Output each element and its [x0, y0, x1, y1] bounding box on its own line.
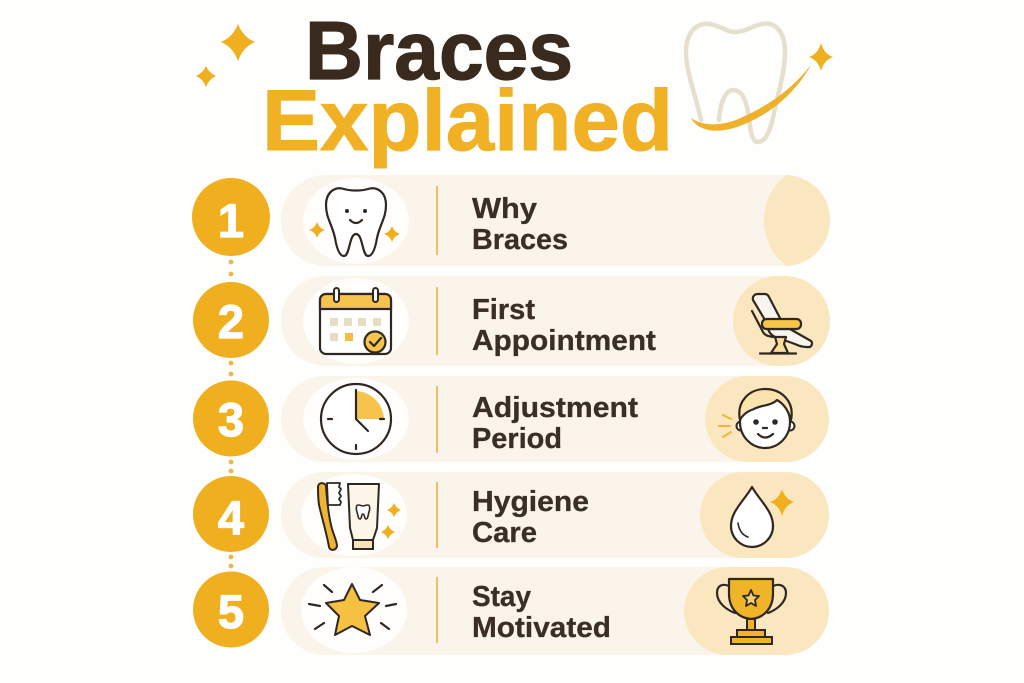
- panel: step 4 hygiene care: [193, 472, 829, 558]
- label: Appointment: [472, 325, 656, 357]
- label: First: [472, 294, 535, 326]
- label: Care: [472, 517, 537, 549]
- row background: [281, 567, 829, 655]
- number badge 2: [193, 282, 269, 358]
- icon: smiling tooth: [303, 178, 409, 264]
- icon: small sparkle top left: [196, 66, 216, 87]
- number badge 3: [193, 380, 269, 456]
- label: Adjustment: [472, 392, 638, 424]
- label: [472, 486, 589, 549]
- icon: header tooth with swoosh: [686, 24, 833, 142]
- label: Stay: [472, 581, 531, 613]
- icon: calendar: [303, 278, 409, 364]
- label: [472, 581, 611, 644]
- icon: water drop: [700, 472, 829, 558]
- title: [262, 4, 673, 169]
- row background: [281, 472, 829, 558]
- label: Hygiene: [472, 486, 589, 518]
- connector dots: [229, 260, 233, 568]
- title: Braces: [305, 4, 573, 97]
- row background: [281, 276, 830, 366]
- label: [472, 193, 568, 256]
- number badge 1: [192, 178, 270, 256]
- icon: large sparkle top left: [221, 24, 255, 61]
- label: Why: [472, 193, 537, 225]
- label: [472, 294, 656, 357]
- number badge 5: 5: [218, 585, 244, 638]
- icon: trophy: [684, 567, 829, 655]
- right accent: [764, 175, 830, 266]
- panel: step 3 adjustment period: [193, 376, 829, 462]
- panel: step 5 stay motivated: [193, 567, 829, 655]
- icon: child face: [705, 376, 829, 462]
- panel: step 1 why braces: [192, 175, 830, 266]
- icon: clock: [303, 378, 409, 460]
- number badge 4: [193, 476, 269, 552]
- label: Braces: [472, 224, 568, 256]
- icon: toothbrush and toothpaste: [301, 474, 407, 556]
- label: Period: [472, 423, 562, 455]
- icon: star with rays: [301, 567, 407, 653]
- row background: [281, 376, 829, 462]
- panel: step 2 first appointment: [193, 276, 830, 366]
- title: Explained: [262, 73, 673, 169]
- number badge 2: 2: [218, 295, 244, 348]
- label: [472, 392, 638, 455]
- number badge 3: 3: [218, 393, 244, 446]
- number badge 1: 1: [218, 194, 244, 247]
- number badge 4: 4: [218, 491, 244, 544]
- row background: [281, 175, 830, 266]
- label: Motivated: [472, 612, 611, 644]
- number badge 5: [193, 572, 269, 648]
- icon: dental chair: [733, 276, 830, 366]
